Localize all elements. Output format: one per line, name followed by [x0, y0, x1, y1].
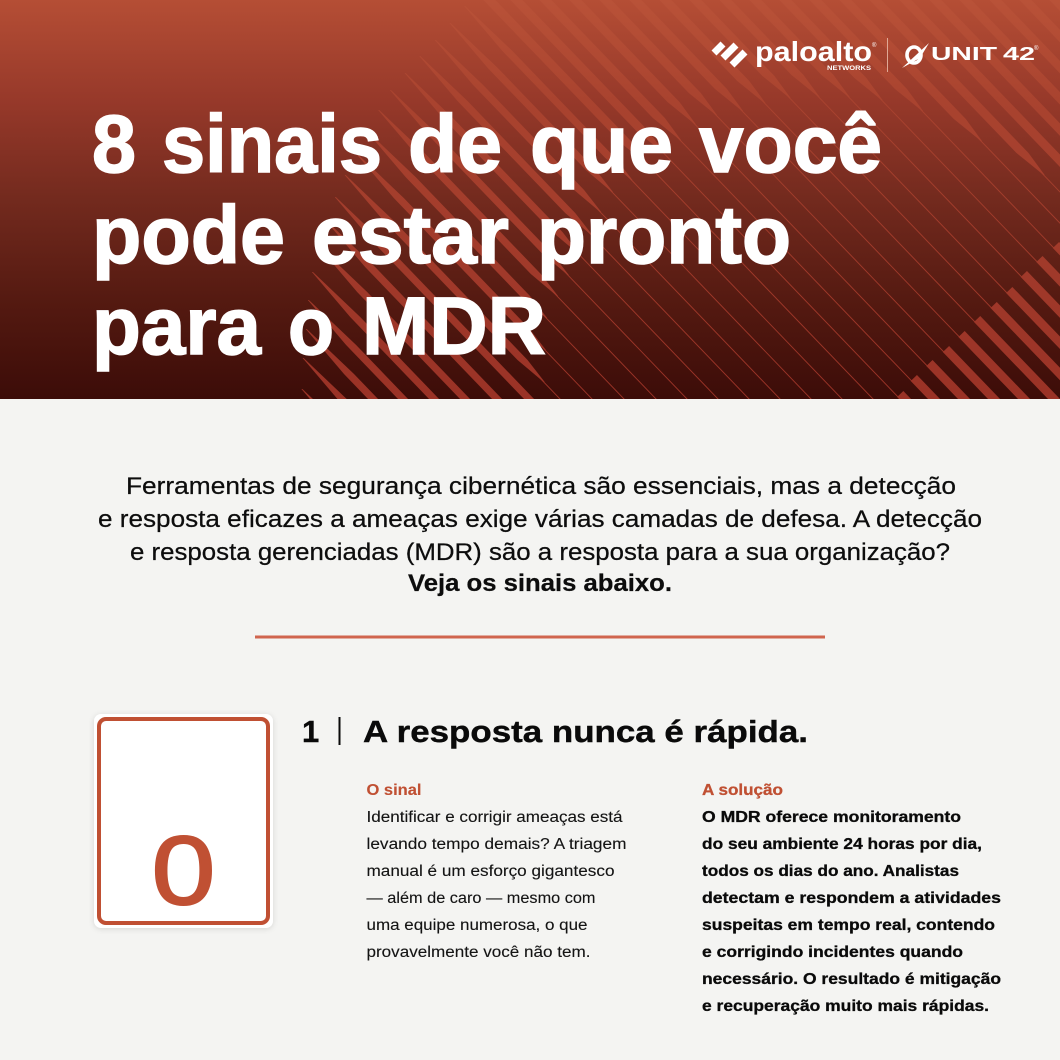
title: sinais	[162, 99, 382, 190]
icon: Unit 42 ring and slash	[902, 43, 929, 68]
column: a solução: necessário. O resultado é mitigação	[702, 971, 1001, 988]
column: a solução: suspeitas em tempo real, contendo	[702, 917, 995, 934]
title: 8	[92, 99, 136, 190]
divider line	[255, 636, 825, 638]
wordmark: unit 42	[931, 44, 1035, 64]
column: a solução: e corrigindo incidentes quando	[702, 944, 963, 961]
title: pronto	[537, 190, 791, 281]
title: o	[288, 281, 334, 372]
header panel	[0, 0, 1060, 399]
title: MDR	[362, 281, 546, 372]
title: você	[699, 99, 882, 190]
intro text: Ferramentas de segurança cibernética são essenciais, mas a detecção	[126, 473, 956, 500]
section heading: 1	[302, 714, 319, 749]
icon: Palo Alto chevrons	[714, 44, 745, 65]
wordmark: networks: NETWORKS	[827, 65, 872, 72]
title: que	[530, 99, 673, 190]
intro text	[98, 473, 982, 597]
logo: Unit 42	[902, 43, 1039, 68]
wordmark: unit 42: 42	[1003, 44, 1035, 64]
wordmark: unit 42: UNIT	[931, 44, 997, 64]
column: a solução: e recuperação muito mais rápidas.	[702, 998, 989, 1015]
intro text: e resposta gerenciadas (MDR) são a resposta para a sua organização?	[130, 539, 950, 566]
wordmark: paloalto: paloalto	[755, 36, 872, 67]
column: o sinal: levando tempo demais? A triagem	[366, 836, 626, 853]
heading text: A resposta nunca é rápida.	[363, 714, 808, 749]
title: pode	[92, 190, 285, 281]
heading separator	[338, 717, 340, 745]
column: o sinal: Identificar e corrigir ameaças está	[366, 809, 623, 826]
registered mark: ®	[872, 42, 877, 49]
column: o sinal: uma equipe numerosa, o que	[366, 917, 588, 934]
label: a solução: A solução	[702, 782, 783, 799]
digit zero: 0	[152, 817, 215, 925]
intro text: e resposta eficazes a ameaças exige várias camadas de defesa. A detecção	[98, 506, 982, 533]
column: o sinal: — além de caro — mesmo com	[366, 890, 596, 907]
column: o sinal: manual é um esforço gigantesco	[366, 863, 614, 880]
column: a solução	[702, 782, 1001, 1015]
label: o sinal: O sinal	[366, 782, 422, 799]
column: a solução: todos os dias do ano. Analistas	[702, 863, 959, 880]
section heading	[302, 714, 808, 749]
column: o sinal: provavelmente você não tem.	[366, 944, 590, 961]
title: de	[408, 99, 502, 190]
card: number placeholder	[94, 714, 273, 928]
column: a solução: do seu ambiente 24 horas por dia,	[702, 836, 982, 853]
intro text: Veja os sinais abaixo.	[408, 570, 672, 597]
logo divider	[887, 38, 888, 72]
title: estar	[312, 190, 509, 281]
registered mark: ®	[1034, 45, 1039, 52]
logo: Palo Alto Networks	[714, 36, 877, 72]
title: para	[92, 281, 262, 372]
column: a solução: O MDR oferece monitoramento	[702, 809, 961, 826]
column: o sinal	[366, 782, 626, 961]
title	[92, 99, 882, 372]
column: a solução: detectam e respondem a atividades	[702, 890, 1001, 907]
